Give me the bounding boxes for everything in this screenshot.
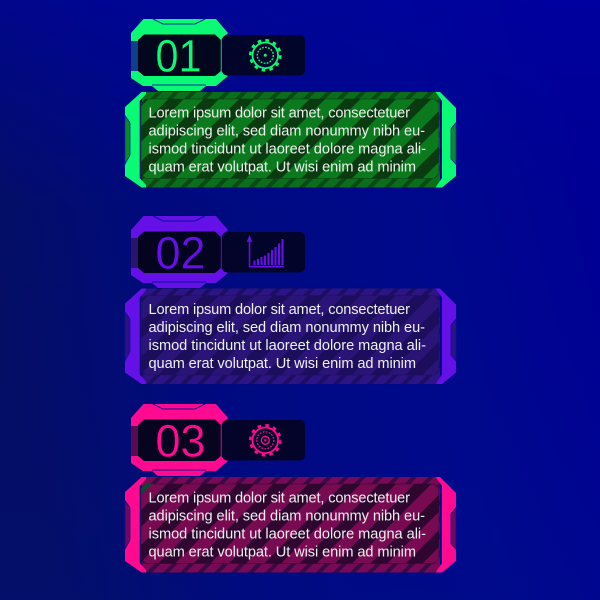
- side tabs: 03: [125, 501, 456, 549]
- body text: 01: Lorem ipsum dolor sit amet, consectetuer: [148, 106, 410, 122]
- panel: step 03 header: [131, 404, 305, 476]
- side tabs: 02: [125, 312, 456, 360]
- body text: 03: Lorem ipsum dolor sit amet, consectetuer: [148, 490, 410, 506]
- plate: 03: [131, 404, 228, 476]
- stripes: 03: [141, 477, 440, 572]
- left bracket: 02: [125, 288, 146, 384]
- plate notch: 01: [131, 41, 138, 71]
- icon: gear: [250, 425, 280, 455]
- number: 02: 02: [156, 228, 206, 278]
- body text: 01: [148, 106, 426, 176]
- icon box: 01: [222, 35, 305, 76]
- icon: bar chart: [248, 237, 284, 267]
- body text: 01: ismod tincidunt ut laoreet dolore magna ali-: [148, 142, 426, 158]
- right bracket: 01: [436, 92, 456, 188]
- panel: step 03 text: [125, 477, 456, 572]
- icon: gear: [250, 40, 280, 70]
- left bracket: 03: [125, 477, 146, 572]
- panel: step 02 header: [131, 216, 305, 288]
- body text: 02: adipiscing elit, sed diam nonummy nibh eu-: [148, 320, 425, 336]
- body text: 03: [148, 490, 426, 560]
- body text: 02: [148, 302, 426, 372]
- plate notch: 02: [131, 238, 138, 268]
- number box: 02: [138, 232, 221, 273]
- right bracket: 03: [436, 477, 456, 572]
- number: 01: 01: [156, 30, 202, 82]
- stripes: 01: [141, 92, 440, 188]
- plate: 02: [131, 216, 228, 288]
- icon box: 03: [222, 420, 305, 460]
- left bracket: 01: [125, 92, 146, 188]
- plate: 01: [131, 19, 228, 91]
- body text: 03: adipiscing elit, sed diam nonummy nibh eu-: [148, 508, 425, 524]
- plate notch: 03: [131, 426, 138, 456]
- body text: 02: Lorem ipsum dolor sit amet, consectetuer: [148, 302, 410, 318]
- body text: 01: adipiscing elit, sed diam nonummy nibh eu-: [148, 124, 425, 140]
- number box: 03: [138, 420, 221, 461]
- body text: 03: quam erat volutpat. Ut wisi enim ad minim: [148, 544, 416, 560]
- panel: step 01 text: [125, 92, 456, 188]
- panel: step 02 text: [125, 288, 456, 384]
- body text: 02: quam erat volutpat. Ut wisi enim ad minim: [148, 356, 416, 372]
- body text: 01: quam erat volutpat. Ut wisi enim ad minim: [148, 160, 416, 176]
- body text: 03: ismod tincidunt ut laoreet dolore magna ali-: [148, 526, 426, 542]
- number: 03: 03: [156, 416, 206, 466]
- right bracket: 02: [436, 288, 456, 384]
- stripes: 02: [141, 288, 440, 384]
- number box: 01: [138, 34, 221, 76]
- body text: 02: ismod tincidunt ut laoreet dolore magna ali-: [148, 338, 426, 354]
- icon box: 02: [222, 232, 305, 272]
- panel: step 01 header: [131, 19, 305, 91]
- side tabs: 01: [125, 116, 456, 164]
